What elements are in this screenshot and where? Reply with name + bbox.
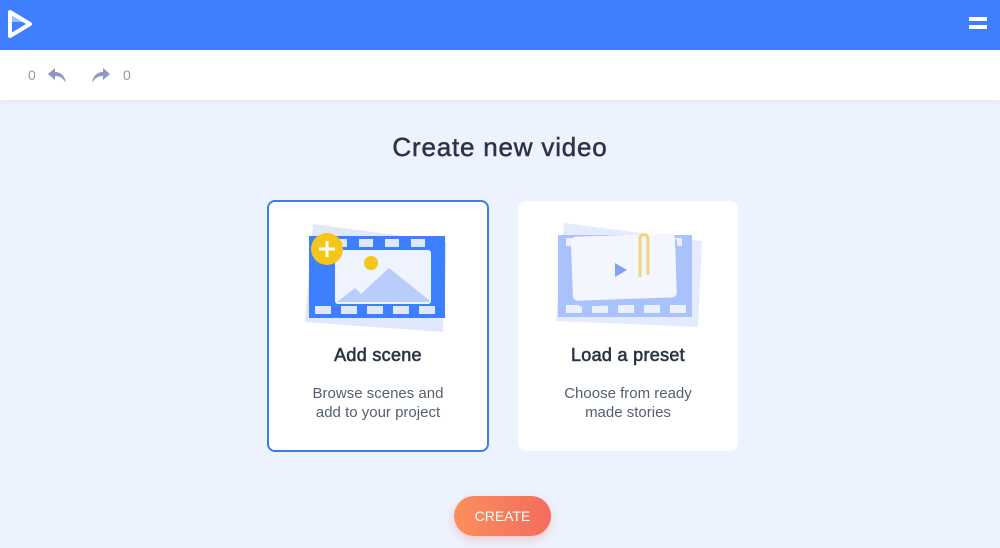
logo bbox=[8, 10, 32, 38]
title: Create new video bbox=[392, 132, 608, 162]
card: add scene bbox=[267, 200, 489, 452]
create button bbox=[454, 496, 551, 536]
undo/redo: 0 bbox=[28, 67, 36, 83]
description bbox=[564, 385, 692, 421]
toolbar bbox=[0, 50, 1000, 100]
heading: Load a preset bbox=[571, 345, 685, 365]
description: add to your project bbox=[316, 404, 440, 421]
menu icon bbox=[969, 17, 987, 29]
icon: film with image bbox=[305, 224, 447, 332]
header bar bbox=[0, 0, 1000, 50]
undo/redo: 0 bbox=[123, 67, 131, 83]
heading: Add scene bbox=[334, 345, 422, 365]
description: Browse scenes and bbox=[313, 385, 443, 402]
icon: preset film bbox=[556, 223, 702, 327]
create button: CREATE bbox=[475, 508, 530, 524]
undo/redo bbox=[28, 67, 131, 83]
description: made stories bbox=[585, 404, 671, 421]
description bbox=[313, 385, 443, 421]
description: Choose from ready bbox=[564, 385, 692, 402]
card: load preset bbox=[518, 201, 738, 451]
